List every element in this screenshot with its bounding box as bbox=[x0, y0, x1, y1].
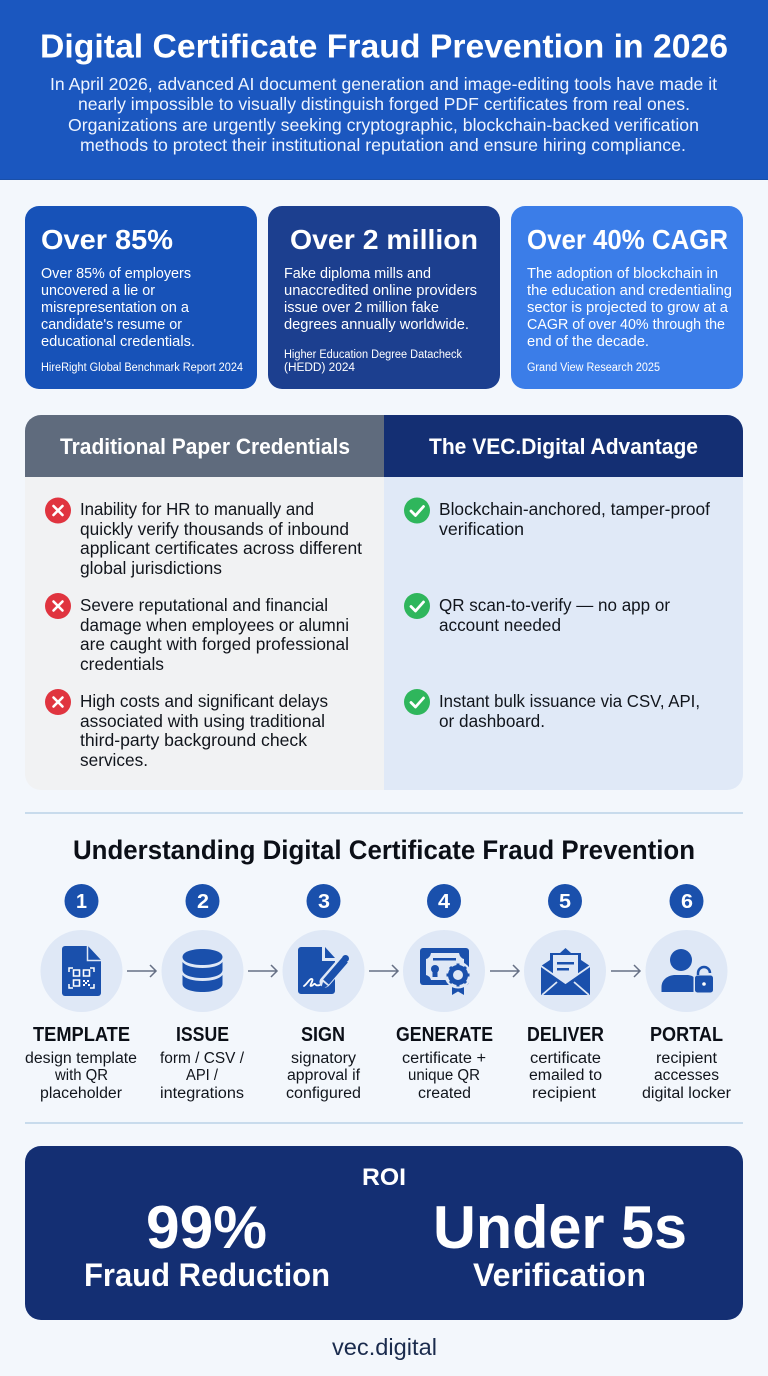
step 3: sign bbox=[282, 884, 364, 1102]
drawback 2: damage when employees or alumni bbox=[80, 615, 349, 635]
icon: person with padlock bbox=[662, 949, 714, 993]
step 1: template bbox=[25, 884, 137, 1102]
step 5: deliver: 5 bbox=[559, 891, 571, 913]
drawback 1: applicant certificates across different bbox=[80, 538, 362, 558]
icon: signed document with pen bbox=[298, 947, 349, 994]
step 4: generate: unique QR bbox=[408, 1067, 480, 1084]
icon: document with QR code bbox=[62, 946, 101, 996]
ROI panel: ROI bbox=[362, 1164, 406, 1191]
step 4: generate: certificate + bbox=[402, 1050, 486, 1067]
advantage 3: Instant bulk issuance via CSV, API, bbox=[439, 691, 700, 711]
arrow 1 to 2 bbox=[127, 965, 156, 977]
drawback 3: High costs and significant delays bbox=[80, 691, 328, 711]
stat card: over 85%: HireRight Global Benchmark Report 2024 bbox=[41, 362, 244, 374]
ROI panel bbox=[25, 1146, 743, 1320]
drawback 2 bbox=[45, 593, 349, 674]
stat card: over 40% CAGR: sector is projected to grow at a bbox=[527, 300, 729, 316]
metric: fraud reduction: 99% bbox=[146, 1194, 267, 1261]
step 3: sign: configured bbox=[286, 1085, 361, 1102]
stat card: over 85%: uncovered a lie or bbox=[41, 283, 155, 299]
stat card: over 40% CAGR: CAGR of over 40% through the bbox=[527, 317, 725, 333]
stat card: over 40% CAGR: Grand View Research 2025 bbox=[527, 362, 660, 374]
step 6: portal bbox=[642, 884, 731, 1102]
step 5: deliver: DELIVER bbox=[527, 1024, 604, 1046]
step 4: generate: 4 bbox=[438, 891, 451, 913]
step 2: issue: API / bbox=[186, 1067, 219, 1084]
stat card: over 85%: educational credentials. bbox=[41, 334, 195, 350]
metric: fraud reduction bbox=[84, 1194, 330, 1293]
drawback 1: Inability for HR to manually and bbox=[80, 499, 314, 519]
step 2: issue: integrations bbox=[160, 1085, 244, 1102]
drawback 2: are caught with forged professional bbox=[80, 634, 349, 654]
arrow 2 to 3 bbox=[248, 965, 277, 977]
arrow 4 to 5 bbox=[490, 965, 519, 977]
step 5: deliver: emailed to bbox=[529, 1067, 602, 1084]
step 2: issue: ISSUE bbox=[176, 1024, 229, 1046]
stat card: over 2 million: Fake diploma mills and bbox=[284, 266, 431, 282]
step 1: template: with QR bbox=[54, 1067, 108, 1084]
comparison panel bbox=[25, 415, 743, 790]
stat card: over 2 million bbox=[268, 206, 500, 389]
metric: verification time: Verification bbox=[473, 1257, 646, 1293]
advantage 1 bbox=[404, 498, 710, 539]
stat card: over 2 million: degrees annually worldwide. bbox=[284, 317, 469, 333]
stat card: over 40% CAGR: the education and credentialing bbox=[527, 283, 732, 299]
metric: verification time: Under 5s bbox=[433, 1194, 687, 1261]
step 1: template: TEMPLATE bbox=[33, 1024, 130, 1046]
metric: fraud reduction: Fraud Reduction bbox=[84, 1257, 330, 1293]
step 5: deliver: recipient bbox=[532, 1085, 597, 1102]
step 6: portal: digital locker bbox=[642, 1085, 731, 1102]
stat card: over 2 million: issue over 2 million fake bbox=[284, 300, 439, 316]
icon: certificate with seal bbox=[420, 948, 472, 995]
stat card: over 40% CAGR: The adoption of blockchain in bbox=[527, 266, 718, 282]
intro text: Organizations are urgently seeking cryptographic, blockchain-backed verification bbox=[68, 115, 699, 135]
drawback 3: associated with using traditional bbox=[80, 711, 325, 731]
step 4: generate bbox=[396, 884, 493, 1102]
step 2: issue: 2 bbox=[197, 891, 209, 913]
stat card: over 2 million: Over 2 million bbox=[290, 224, 478, 255]
icon: envelope with letter bbox=[541, 948, 590, 995]
step 4: generate: GENERATE bbox=[396, 1024, 493, 1046]
heading: the VEC.Digital advantage: The VEC.Digital Advantage bbox=[429, 434, 698, 459]
drawback 2: credentials bbox=[80, 654, 164, 674]
drawback 1 bbox=[45, 498, 362, 578]
drawback 1: quickly verify thousands of inbound bbox=[80, 519, 349, 539]
intro text: nearly impossible to visually distinguish forged PDF certificates from real ones. bbox=[78, 94, 690, 114]
step 6: portal: PORTAL bbox=[650, 1024, 723, 1046]
step 3: sign: approval if bbox=[287, 1067, 361, 1084]
stat card: over 2 million: unaccredited online providers bbox=[284, 283, 477, 299]
intro text: In April 2026, advanced AI document generation and image-editing tools have made it bbox=[50, 74, 717, 94]
step 3: sign: signatory bbox=[291, 1050, 356, 1067]
advantage 2 bbox=[404, 593, 670, 635]
arrow 5 to 6 bbox=[611, 965, 640, 977]
advantage 2: QR scan-to-verify — no app or bbox=[439, 595, 670, 615]
stat card: over 2 million: Higher Education Degree Datacheck bbox=[284, 349, 462, 361]
stat card: over 85% bbox=[25, 206, 257, 389]
step 1: template: design template bbox=[25, 1050, 137, 1067]
drawback 3: third-party background check bbox=[80, 730, 307, 750]
advantage 1: verification bbox=[439, 519, 524, 539]
intro text bbox=[50, 74, 717, 155]
stat card: over 85%: candidate's resume or bbox=[41, 317, 182, 333]
section heading: Understanding Digital Certificate Fraud Prevention bbox=[73, 835, 695, 865]
advantage 2: account needed bbox=[439, 615, 561, 635]
step 2: issue bbox=[160, 884, 245, 1102]
title: Digital Certificate Fraud Prevention in 2026 bbox=[40, 28, 728, 64]
advantage 3: or dashboard. bbox=[439, 711, 545, 731]
step 5: deliver: certificate bbox=[530, 1050, 601, 1067]
step 3: sign: 3 bbox=[318, 891, 330, 913]
stat card: over 40% CAGR bbox=[511, 206, 743, 389]
stat card: over 85%: Over 85% of employers bbox=[41, 266, 191, 282]
drawback 1: global jurisdictions bbox=[80, 558, 222, 578]
step 2: issue: form / CSV / bbox=[160, 1050, 245, 1067]
step 4: generate: created bbox=[418, 1085, 471, 1102]
step 6: portal: 6 bbox=[681, 891, 693, 913]
advantage 3 bbox=[404, 689, 700, 731]
drawback 3: services. bbox=[80, 750, 148, 770]
icon: database bbox=[182, 949, 222, 992]
stat card: over 40% CAGR: end of the decade. bbox=[527, 334, 649, 350]
intro text: methods to protect their institutional reputation and ensure hiring compliance. bbox=[80, 135, 686, 155]
footer URL: vec.digital bbox=[332, 1334, 437, 1360]
step 6: portal: recipient bbox=[656, 1050, 718, 1067]
step 5: deliver bbox=[524, 884, 606, 1102]
stat card: over 40% CAGR: Over 40% CAGR bbox=[527, 224, 728, 255]
step 6: portal: accesses bbox=[654, 1067, 719, 1084]
drawback 3 bbox=[45, 689, 328, 770]
header banner bbox=[0, 0, 768, 180]
step 1: template: placeholder bbox=[40, 1085, 122, 1102]
advantage 1: Blockchain-anchored, tamper-proof bbox=[439, 499, 710, 519]
heading: traditional paper credentials: Traditional Paper Credentials bbox=[60, 434, 350, 459]
stat card: over 2 million: (HEDD) 2024 bbox=[284, 362, 356, 374]
step 3: sign: SIGN bbox=[301, 1024, 345, 1046]
arrow 3 to 4 bbox=[369, 965, 398, 977]
drawback 2: Severe reputational and financial bbox=[80, 595, 328, 615]
step 1: template: 1 bbox=[76, 891, 87, 913]
stat card: over 85%: Over 85% bbox=[41, 224, 173, 255]
stat card: over 85%: misrepresentation on a bbox=[41, 300, 190, 316]
metric: verification time bbox=[433, 1194, 687, 1293]
